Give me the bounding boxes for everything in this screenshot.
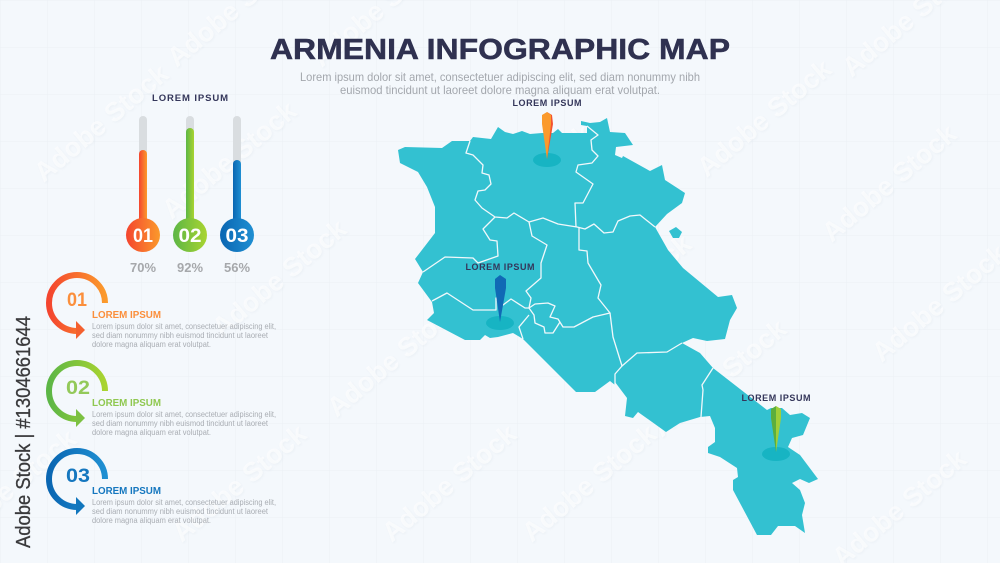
map of Armenia xyxy=(398,98,818,535)
panel: list item 02: sed diam nonummy nibh euismod tincidunt ut laoreet xyxy=(92,419,269,428)
gauge 03: 03 xyxy=(226,226,248,247)
gauge 02 xyxy=(173,116,207,275)
stock watermarks: Adobe Stock xyxy=(551,228,698,358)
stock watermarks: Adobe Stock xyxy=(451,118,598,248)
gauge 03 xyxy=(220,116,254,275)
map pin: green xyxy=(742,393,810,461)
subtitle: euismod tincidunt ut laoreet dolore magna aliquam erat volutpat. xyxy=(340,83,660,97)
gauge 01: 70% xyxy=(130,261,156,275)
map pin: blue: LOREM IPSUM xyxy=(466,262,534,272)
panel: list item 03: Lorem ipsum dolor sit amet, consectetuer adipiscing elit, xyxy=(92,498,276,507)
stock watermarks: Adobe Stock xyxy=(816,118,963,248)
gauge 01: 01 xyxy=(133,226,153,247)
panel: list item 03 xyxy=(49,451,276,525)
panel: list item 03: LOREM IPSUM xyxy=(92,486,161,497)
stock id side label: Adobe Stock | #1304661644 xyxy=(13,316,35,548)
subtitle xyxy=(300,70,700,97)
panel: list item 01 xyxy=(49,275,276,349)
panel: list item 01: LOREM IPSUM xyxy=(92,310,161,321)
stock watermarks: Adobe Stock xyxy=(376,418,523,548)
panel: list item 01: Lorem ipsum dolor sit amet, consectetuer adipiscing elit, xyxy=(92,322,276,331)
chart heading: LOREM IPSUM xyxy=(152,93,228,104)
stock watermarks: Adobe Stock xyxy=(28,58,175,188)
stock watermarks: Adobe Stock xyxy=(156,95,303,225)
stock watermarks: Adobe Stock xyxy=(691,53,838,183)
panel: thermometer chart xyxy=(126,93,254,275)
gauge 01 xyxy=(126,116,160,275)
gauge 03: 56% xyxy=(224,261,250,275)
stock watermarks: Adobe Stock xyxy=(516,418,663,548)
panel: list item 02: 02 xyxy=(66,378,90,399)
map: exclave xyxy=(669,227,682,238)
stock watermarks: Adobe Stock xyxy=(166,418,313,548)
map: region borders xyxy=(423,126,713,417)
stock watermarks: Adobe Stock xyxy=(321,293,468,423)
panel: list item 01: dolore magna aliquam erat volutpat. xyxy=(92,340,211,349)
icon: arrow ring 03 xyxy=(49,451,105,515)
panel: list item 02 xyxy=(49,363,276,437)
gauge 02: 92% xyxy=(177,261,203,275)
panel: list item 02: LOREM IPSUM xyxy=(92,398,161,409)
panel: list item 01: sed diam nonummy nibh euismod tincidunt ut laoreet xyxy=(92,331,269,340)
icon: arrow ring 02 xyxy=(49,363,105,427)
panel: list item 02: Lorem ipsum dolor sit amet, consectetuer adipiscing elit, xyxy=(92,410,276,419)
title: ARMENIA INFOGRAPHIC MAP xyxy=(270,34,730,66)
stock watermarks: Adobe Stock xyxy=(646,313,793,443)
panel: list item 03: 03 xyxy=(66,466,90,487)
icon: arrow ring 01 xyxy=(49,275,105,339)
panel: list item 03: sed diam nonummy nibh euismod tincidunt ut laoreet xyxy=(92,507,269,516)
panel: list item 01: 01 xyxy=(67,290,87,311)
map pin: green: LOREM IPSUM xyxy=(742,393,810,403)
panel: list item 02: dolore magna aliquam erat volutpat. xyxy=(92,428,211,437)
gauge 02: 02 xyxy=(178,226,202,247)
stock watermarks: Adobe Stock xyxy=(206,213,353,343)
map pin: blue xyxy=(466,262,534,330)
subtitle: Lorem ipsum dolor sit amet, consectetuer adipiscing elit, sed diam nonummy nibh xyxy=(300,70,700,84)
map: landmass xyxy=(398,118,818,535)
map pin: orange: LOREM IPSUM xyxy=(512,98,582,108)
map pin: orange xyxy=(512,98,582,167)
panel: list item 03: dolore magna aliquam erat volutpat. xyxy=(92,516,211,525)
